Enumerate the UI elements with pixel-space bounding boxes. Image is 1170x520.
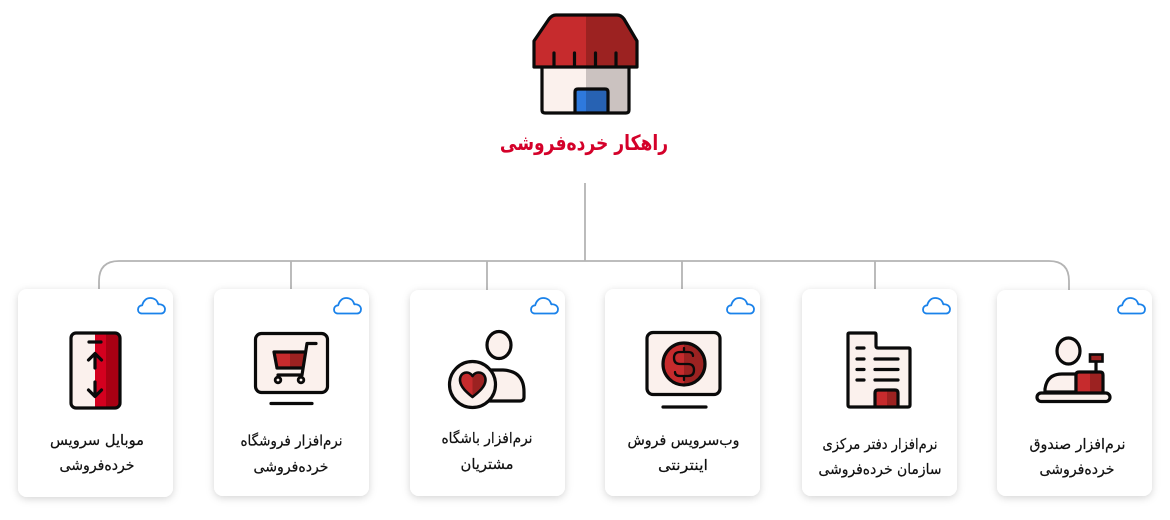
icon: cart monitor <box>256 334 328 404</box>
label: وب‌سرویس فروش <box>628 432 740 449</box>
connector tree <box>99 183 1069 291</box>
icon: cloud <box>334 298 361 314</box>
icon: cloud <box>138 298 165 314</box>
panel: cash register software: خرده‌فروشی <box>1040 461 1114 478</box>
title: راهکار خرده‌فروشی <box>500 130 668 155</box>
panel: cash register software <box>997 290 1152 496</box>
label: نرم‌افزار صندوق <box>1030 436 1126 453</box>
icon: mobile <box>71 333 120 408</box>
panel: mobile service: خرده‌فروشی <box>60 457 134 474</box>
icon: dollar monitor <box>647 332 720 407</box>
panel: online sales web service <box>605 289 760 496</box>
panel: online sales web service: اینترنتی <box>658 457 708 474</box>
label: نرم‌افزار فروشگاه <box>240 432 342 450</box>
icon: cloud <box>1118 298 1145 314</box>
panel: mobile service <box>18 289 173 497</box>
panel: store software: خرده‌فروشی <box>254 458 328 476</box>
icon: cloud <box>531 298 558 314</box>
icon: cloud <box>727 298 754 314</box>
label: نرم‌افزار باشگاه <box>442 429 532 447</box>
icon: customer heart <box>450 332 524 408</box>
icon: cloud <box>923 298 950 314</box>
icon: office building <box>848 332 910 407</box>
label: موبایل سرویس <box>50 432 144 449</box>
icon: shop <box>534 15 637 113</box>
panel: customer club <box>410 290 565 496</box>
panel: head office software <box>802 289 957 496</box>
panel: customer club: مشتریان <box>460 456 514 473</box>
panel: head office software: سازمان خرده‌فروشی <box>818 461 942 478</box>
icon: cashier <box>1037 338 1110 402</box>
panel: store software <box>214 289 369 496</box>
label: نرم‌افزار دفتر مرکزی <box>822 436 938 453</box>
